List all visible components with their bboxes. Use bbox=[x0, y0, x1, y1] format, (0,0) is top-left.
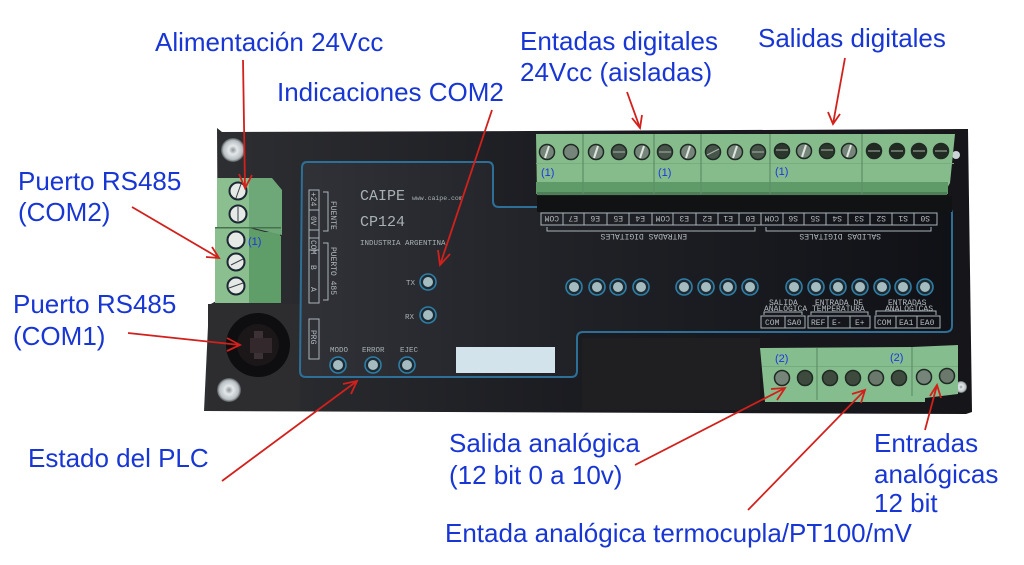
upside-down digital labels: E3 bbox=[679, 213, 689, 222]
footnote markers: (1) bbox=[248, 236, 261, 248]
upside-down digital labels: E2 bbox=[702, 213, 712, 222]
arrow: entradas analogicas bbox=[925, 385, 941, 430]
upside-down digital labels: S3 bbox=[854, 213, 864, 222]
analog labels: SALIDA bbox=[769, 299, 798, 308]
label: salida analogica: (12 bit 0 a 10v) bbox=[449, 460, 622, 490]
left vertical connector labels: PUERTO 485 bbox=[328, 247, 337, 295]
upside-down digital labels: S2 bbox=[876, 213, 886, 222]
LED indicators bbox=[330, 274, 933, 373]
analog labels: EA1 bbox=[899, 319, 914, 328]
analog labels: E- bbox=[832, 319, 842, 328]
upside-down digital labels: SALIDAS DIGITALES bbox=[799, 231, 881, 240]
arrow: entradas digitales bbox=[627, 92, 642, 128]
LED labels: RX bbox=[405, 314, 415, 322]
footnote markers: (1) bbox=[541, 167, 554, 179]
left vertical connector labels bbox=[308, 190, 337, 359]
upside-down digital labels: S0 bbox=[920, 213, 930, 222]
analog labels bbox=[761, 299, 940, 328]
arrow: salida analogica bbox=[635, 388, 785, 465]
label: termocupla: Entada analógica termocupla/PT100/mV bbox=[445, 518, 912, 548]
left vertical connector labels: PRG bbox=[308, 330, 317, 345]
LED labels: TX bbox=[406, 280, 416, 288]
left vertical connector labels: 0V bbox=[308, 216, 317, 226]
left vertical connector labels: B bbox=[308, 265, 317, 270]
lower-left plate bbox=[208, 304, 300, 410]
analog labels: EA0 bbox=[920, 319, 935, 328]
analog labels: E+ bbox=[855, 319, 865, 328]
analog labels: ANALOGICAS bbox=[885, 305, 933, 314]
label: RS485 COM1: (COM1) bbox=[13, 321, 105, 351]
footnote markers bbox=[248, 166, 903, 365]
panel: blue board outline bbox=[300, 162, 952, 377]
footnote markers: (1) bbox=[658, 167, 671, 179]
LED labels: MODO bbox=[330, 347, 349, 355]
upside-down digital labels: COM bbox=[764, 213, 779, 222]
upside-down digital labels: E5 bbox=[613, 213, 623, 222]
analog labels: REF bbox=[811, 319, 826, 328]
arrow: alimentacion bbox=[239, 60, 252, 188]
upside-down digital labels: E4 bbox=[635, 213, 645, 222]
bottom terminal blocks bbox=[760, 345, 958, 402]
brand text: www.caipe.com bbox=[412, 195, 463, 202]
upside-down digital labels bbox=[541, 213, 937, 240]
upside-down digital labels: E7 bbox=[568, 213, 578, 222]
left vertical connector labels: COM bbox=[308, 240, 317, 255]
footnote markers: (2) bbox=[775, 353, 788, 365]
upside-down digital labels: S1 bbox=[898, 213, 908, 222]
LED labels: ERROR bbox=[362, 347, 385, 355]
brand text: CP124 bbox=[360, 214, 405, 231]
label: RS485 COM2: (COM2) bbox=[18, 197, 110, 227]
label: salida analogica: Salida analógica bbox=[449, 428, 640, 458]
label plate bbox=[456, 347, 555, 373]
label: indicaciones: Indicaciones COM2 bbox=[277, 77, 504, 107]
label: alimentacion: Alimentación 24Vcc bbox=[155, 27, 383, 57]
LED labels bbox=[330, 280, 419, 355]
label: entradas digitales: 24Vcc (aisladas) bbox=[520, 57, 712, 87]
analog labels: COM bbox=[877, 319, 892, 328]
label: RS485 COM1: Puerto RS485 bbox=[13, 289, 176, 319]
lower dark plate bbox=[582, 338, 760, 410]
analog labels: TEMPERATURA bbox=[812, 305, 865, 314]
upside-down digital labels: S4 bbox=[832, 213, 842, 222]
footnote markers: (2) bbox=[890, 352, 903, 364]
label: RS485 COM2 bbox=[18, 166, 181, 227]
connector: mini-DIN bbox=[226, 313, 290, 377]
label: entradas digitales: Entadas digitales bbox=[520, 26, 718, 56]
left vertical connector labels: A bbox=[308, 287, 317, 292]
label: entradas digitales bbox=[520, 26, 718, 87]
label: entradas analogicas bbox=[874, 428, 998, 518]
upside-down digital labels: S5 bbox=[810, 213, 820, 222]
label: salidas digitales: Salidas digitales bbox=[758, 23, 946, 53]
left terminal blocks bbox=[215, 178, 282, 303]
label: entradas analogicas: analógicas bbox=[874, 459, 998, 489]
arrow: salidas digitales bbox=[828, 58, 845, 124]
analog labels: SA0 bbox=[787, 319, 802, 328]
upside-down digital labels: S6 bbox=[788, 213, 798, 222]
arrow: COM2 bbox=[132, 207, 219, 258]
footnote markers: (1) bbox=[775, 166, 788, 178]
analog labels: ANALOGICA bbox=[764, 305, 807, 314]
analog labels: COM bbox=[765, 319, 780, 328]
upside-down digital labels: E1 bbox=[723, 213, 733, 222]
upside-down digital labels: ENTRADAS DIGITALES bbox=[600, 231, 687, 240]
LED labels: EJEC bbox=[400, 347, 419, 355]
label: RS485 COM1 bbox=[13, 289, 176, 351]
label: estado: Estado del PLC bbox=[28, 443, 209, 473]
top terminal blocks bbox=[536, 134, 955, 212]
left vertical connector labels: +24 bbox=[308, 192, 317, 207]
brand text: CAIPE bbox=[360, 188, 405, 205]
metal bolts bbox=[217, 138, 967, 402]
upside-down digital labels: COM bbox=[544, 213, 559, 222]
label: RS485 COM2: Puerto RS485 bbox=[18, 166, 181, 196]
analog labels: ENTRADAS bbox=[888, 299, 927, 308]
upside-down digital labels: COM bbox=[655, 213, 670, 222]
upside-down digital labels: E6 bbox=[590, 213, 600, 222]
label: salida analogica bbox=[449, 428, 640, 490]
brand text bbox=[360, 188, 463, 248]
arrow: estado bbox=[222, 381, 357, 481]
analog labels: ENTRADA DE bbox=[815, 299, 863, 308]
arrow: indicaciones bbox=[438, 110, 492, 265]
label: entradas analogicas: Entradas bbox=[874, 428, 978, 458]
upside-down digital labels: E0 bbox=[745, 213, 755, 222]
label: entradas analogicas: 12 bit bbox=[874, 488, 938, 518]
left vertical connector labels: FUENTE bbox=[328, 201, 337, 230]
device body bbox=[204, 128, 972, 414]
arrow: termocupla bbox=[748, 390, 865, 510]
brand text: INDUSTRIA ARGENTINA bbox=[360, 240, 446, 248]
arrow: COM1 bbox=[128, 333, 240, 351]
